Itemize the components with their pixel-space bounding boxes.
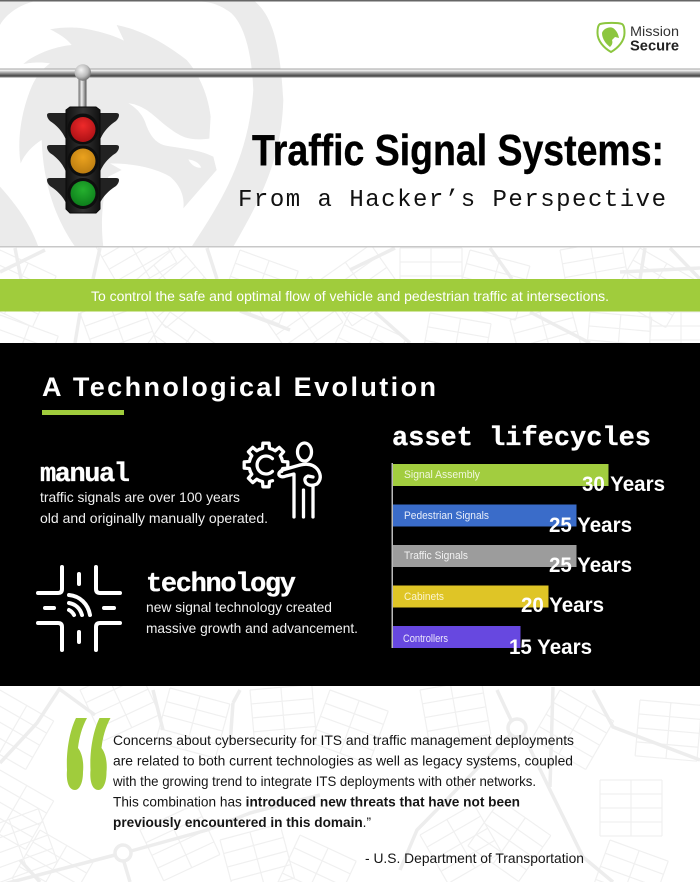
street map background: middle strip xyxy=(0,214,700,393)
panel: technological evolution xyxy=(0,343,700,686)
header panel xyxy=(0,0,700,248)
quote text: with the growing trend to integrate ITS deployments with other networks. xyxy=(112,773,536,789)
block: manual: traffic signals are over 100 years xyxy=(40,489,240,505)
quote attribution: - U.S. Department of Transportation xyxy=(365,850,584,866)
block: manual: old and originally manually operated. xyxy=(40,510,268,526)
street map background: lower area xyxy=(0,664,700,882)
logo wordmark xyxy=(630,23,679,54)
heading: asset lifecycles: asset lifecycles xyxy=(392,424,651,454)
bar: pedestrian signals: Pedestrian Signals xyxy=(404,510,489,522)
rule under header xyxy=(0,246,700,248)
icon: traffic light xyxy=(47,64,119,213)
block: technology: new signal technology created xyxy=(146,599,332,615)
amber lamp xyxy=(70,148,96,174)
logo wordmark: Mission xyxy=(630,23,679,39)
wings xyxy=(47,113,68,147)
bar chart: asset lifecycles xyxy=(392,463,665,659)
green banner xyxy=(0,279,700,312)
block: technology: massive growth and advancement. xyxy=(146,620,358,636)
block: technology: technology xyxy=(146,570,296,600)
green lamp xyxy=(70,181,96,206)
icon: quotation mark xyxy=(67,718,110,790)
pole xyxy=(0,68,700,78)
bar: traffic signals: Traffic Signals xyxy=(404,550,468,562)
bar: controllers: 15 Years xyxy=(509,636,592,659)
bar: pedestrian signals xyxy=(393,504,632,537)
quote text: This combination has introduced new threats that have not been xyxy=(113,794,520,810)
quote text: Concerns about cybersecurity for ITS and traffic management deployments xyxy=(113,732,574,748)
bar: controllers xyxy=(393,626,592,659)
watermark: eagle shield xyxy=(0,0,283,247)
bar: signal assembly: 30 Years xyxy=(582,473,665,496)
block: manual: manual xyxy=(40,460,130,490)
bar: cabinets: Cabinets xyxy=(404,591,444,603)
housing xyxy=(66,107,100,213)
logo: Mission Secure xyxy=(598,23,679,54)
bar: traffic signals xyxy=(393,545,632,577)
quote text: previously encountered in this domain.” xyxy=(113,814,371,830)
bar: controllers: Controllers xyxy=(403,633,448,645)
icon: gear and person xyxy=(244,443,320,517)
bar: traffic signals: 25 Years xyxy=(549,554,632,577)
green banner: To control the safe and optimal flow of vehicle and pedestrian traffic at intersections. xyxy=(91,288,609,304)
bar: cabinets xyxy=(393,586,604,617)
bar: signal assembly xyxy=(393,464,665,496)
bar: pedestrian signals: 25 Years xyxy=(549,514,632,537)
bar: signal assembly: Signal Assembly xyxy=(404,469,480,481)
quote text xyxy=(112,732,574,830)
quote text: are related to both current technologies as well as legacy systems, coupled xyxy=(113,752,573,768)
top rule xyxy=(0,0,700,2)
red lamp xyxy=(70,117,96,142)
heading underline xyxy=(42,410,124,415)
subtitle: From a Hacker’s Perspective xyxy=(238,187,666,214)
icon: intersection with wifi xyxy=(38,567,120,650)
bar: cabinets: 20 Years xyxy=(521,594,604,617)
icon: green shield xyxy=(598,23,624,52)
heading: A Technological Evolution xyxy=(42,372,436,402)
block: technology xyxy=(146,570,358,636)
logo wordmark: Secure xyxy=(630,38,679,54)
block: manual xyxy=(40,460,268,526)
